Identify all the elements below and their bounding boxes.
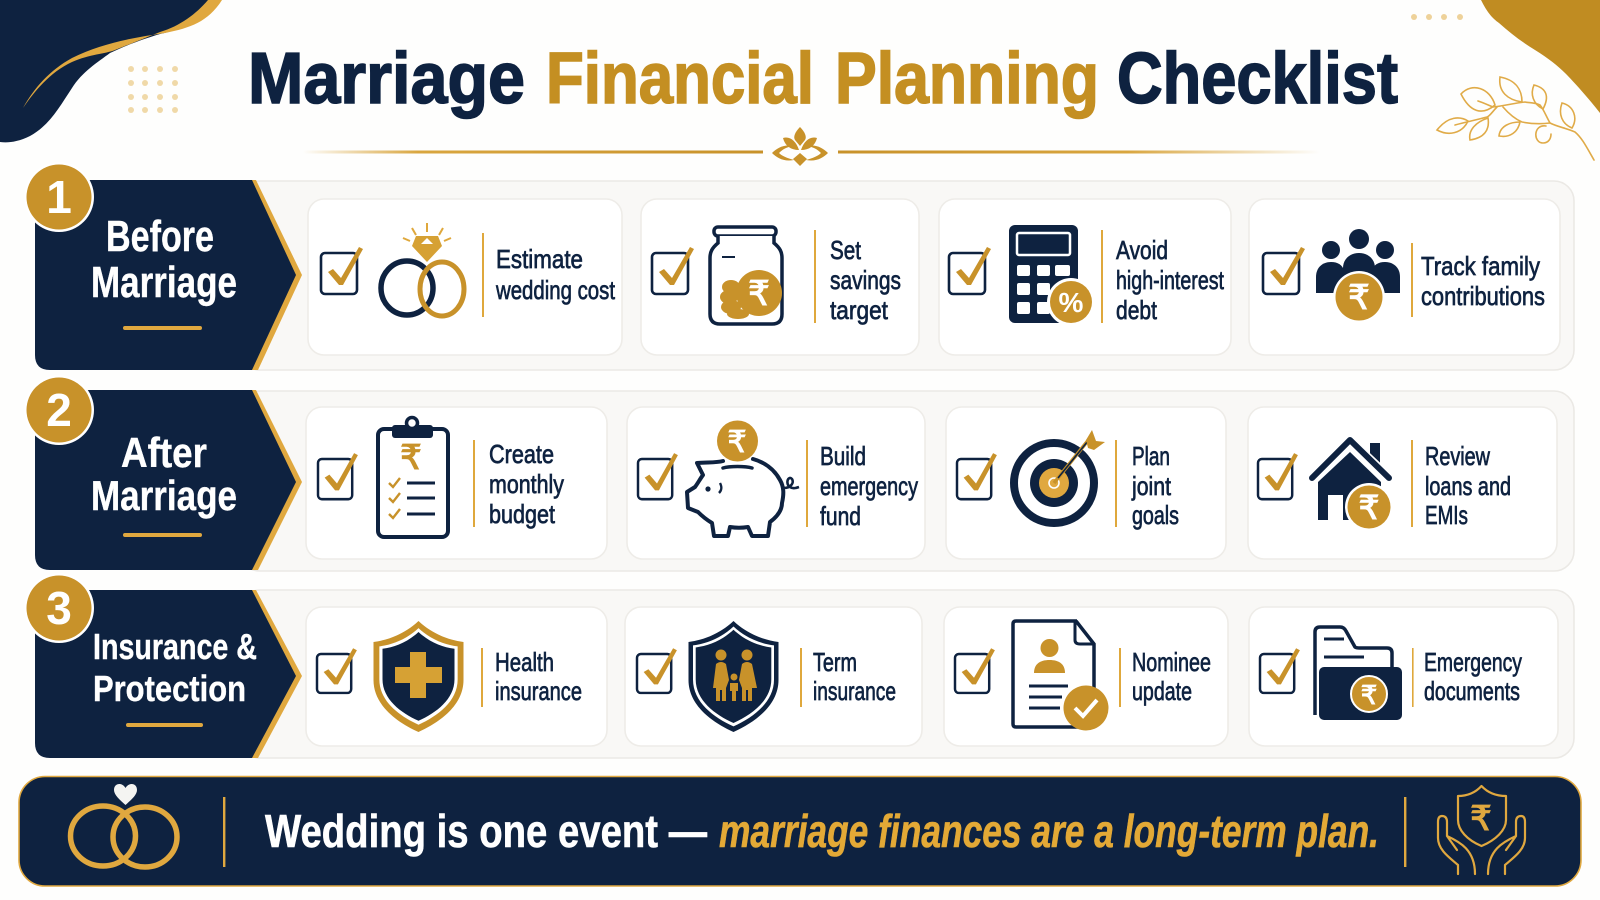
label: emergency [820,471,918,501]
label [1424,647,1522,706]
label: wedding cost [495,275,616,305]
card: Track family contributions [1249,199,1560,355]
label [489,439,564,529]
card: Review loans and EMIs [1248,407,1557,559]
row panel 3 [240,590,1574,758]
icon: emergency folder [1315,627,1402,720]
corner decoration: top-right gold wave [1481,0,1600,113]
tag: After Marriage: Marriage [91,472,237,519]
label: monthly [489,469,564,499]
card: Emergency documents [1249,607,1558,746]
title: Checklist [1117,39,1398,119]
card: Avoid high-interest debt [939,199,1231,355]
icon: family shield [688,621,778,732]
checkbox [652,247,694,294]
badge: number 3: 3 [46,582,72,634]
icon: nominee document [1013,621,1108,730]
label [830,235,901,325]
card: Term insurance [625,607,922,746]
icon: piggy bank with coin [687,420,799,536]
checkbox [949,247,991,294]
label: Review [1425,441,1490,471]
checkbox [1258,453,1298,499]
icon: family with rupee coin [1316,229,1400,323]
checkbox [1260,648,1300,693]
icon: calculator with percent [1009,225,1095,326]
badge: number 1 [24,162,94,232]
label: Emergency [1424,647,1522,677]
label: Avoid [1116,235,1168,265]
icon: target with arrow [1014,430,1105,523]
checkbox [321,247,363,294]
icon: calculator with percent: % [1059,287,1084,318]
label: savings [830,265,901,295]
checkbox [957,453,997,499]
tag: Insurance & Protection: Insurance & [93,626,257,667]
label: insurance [495,676,582,706]
card: Health insurance [306,607,607,746]
title: Planning [835,39,1099,119]
label: EMIs [1425,500,1468,530]
label [813,647,896,706]
card: Create monthly budget [306,407,607,559]
label: insurance [813,676,896,706]
label: update [1132,676,1192,706]
checkbox [955,648,995,693]
title [248,39,1398,119]
label: joint [1131,471,1172,501]
card: Plan joint goals [946,407,1226,559]
tag: After Marriage [35,390,302,570]
leaf branch decoration [1437,77,1594,160]
label: high-interest [1116,265,1225,295]
badge: number 2 [24,375,94,445]
tag: Before Marriage [35,180,302,370]
title: Financial [546,39,814,119]
checkbox [317,648,357,693]
icon: emergency folder: ₹ [1361,680,1377,710]
label: loans and [1425,471,1511,501]
section 1: Before Marriage [24,162,1574,370]
tag: After Marriage: After [121,429,207,476]
icon: hands holding rupee shield [1438,786,1525,874]
corner decoration: top-left navy wave [0,0,222,142]
label: Track family [1421,251,1540,281]
label [495,244,616,305]
card: Nominee update [944,607,1228,746]
label: budget [489,499,556,529]
row panel 2 [240,391,1574,571]
section 2: After Marriage [24,375,1574,571]
title divider with ornament [303,127,1320,166]
icon: interlocked rings with heart [70,784,177,867]
tag: Insurance & Protection [35,590,302,758]
icon: clipboard budget [378,418,448,537]
icon: clipboard budget: ₹ [400,439,422,477]
label: Estimate [496,244,583,274]
banner message: Wedding is one event — [265,805,707,857]
label: target [830,295,889,325]
icon: piggy bank with coin: ₹ [727,426,747,459]
checkbox [1263,247,1305,294]
label: Plan [1132,441,1170,471]
icon: house with rupee coin [1312,440,1393,531]
label: debt [1116,295,1158,325]
banner message [265,805,1379,857]
card: Estimate wedding cost [308,199,622,355]
icon: house with rupee coin: ₹ [1358,489,1380,526]
checkbox [637,648,677,693]
checkbox [638,453,678,499]
label [1421,251,1545,311]
tag: Before Marriage: Before [106,212,214,261]
label [495,647,582,706]
title: Marriage [248,39,525,119]
banner message: marriage finances are a long-term plan. [719,805,1379,857]
label [1116,235,1225,325]
badge: number 1: 1 [46,171,72,223]
label [1131,441,1179,530]
icon: savings jar [710,227,782,324]
label: Health [495,647,554,677]
badge: number 3 [24,573,94,643]
bottom banner [19,776,1581,886]
dot row: top-right [1411,14,1463,20]
icon: hands holding rupee shield: ₹ [1470,800,1492,838]
dot grid: top-left [128,66,178,113]
card: Set savings target [641,199,919,355]
icon: rings with diamond [381,223,464,316]
label: fund [820,501,861,531]
label: Create [489,439,554,469]
label: goals [1132,500,1179,530]
label [820,441,918,531]
label: Set [830,235,862,265]
icon: family with rupee coin: ₹ [1348,279,1370,317]
section 3: Insurance & Protection [24,573,1574,758]
label: Build [820,441,866,471]
icon: savings jar: ₹ [748,275,770,313]
label: contributions [1421,281,1545,311]
row panel 1 [240,181,1574,370]
icon: health shield [374,621,464,732]
tag: Before Marriage: Marriage [91,258,237,307]
label [1132,647,1211,706]
badge: number 2: 2 [46,384,72,436]
card: Build emergency fund [627,407,925,559]
label: Term [813,647,857,677]
tag: Insurance & Protection: Protection [93,668,246,709]
label: Nominee [1132,647,1211,677]
label: documents [1424,676,1520,706]
checkbox [318,453,358,499]
label [1425,441,1511,530]
